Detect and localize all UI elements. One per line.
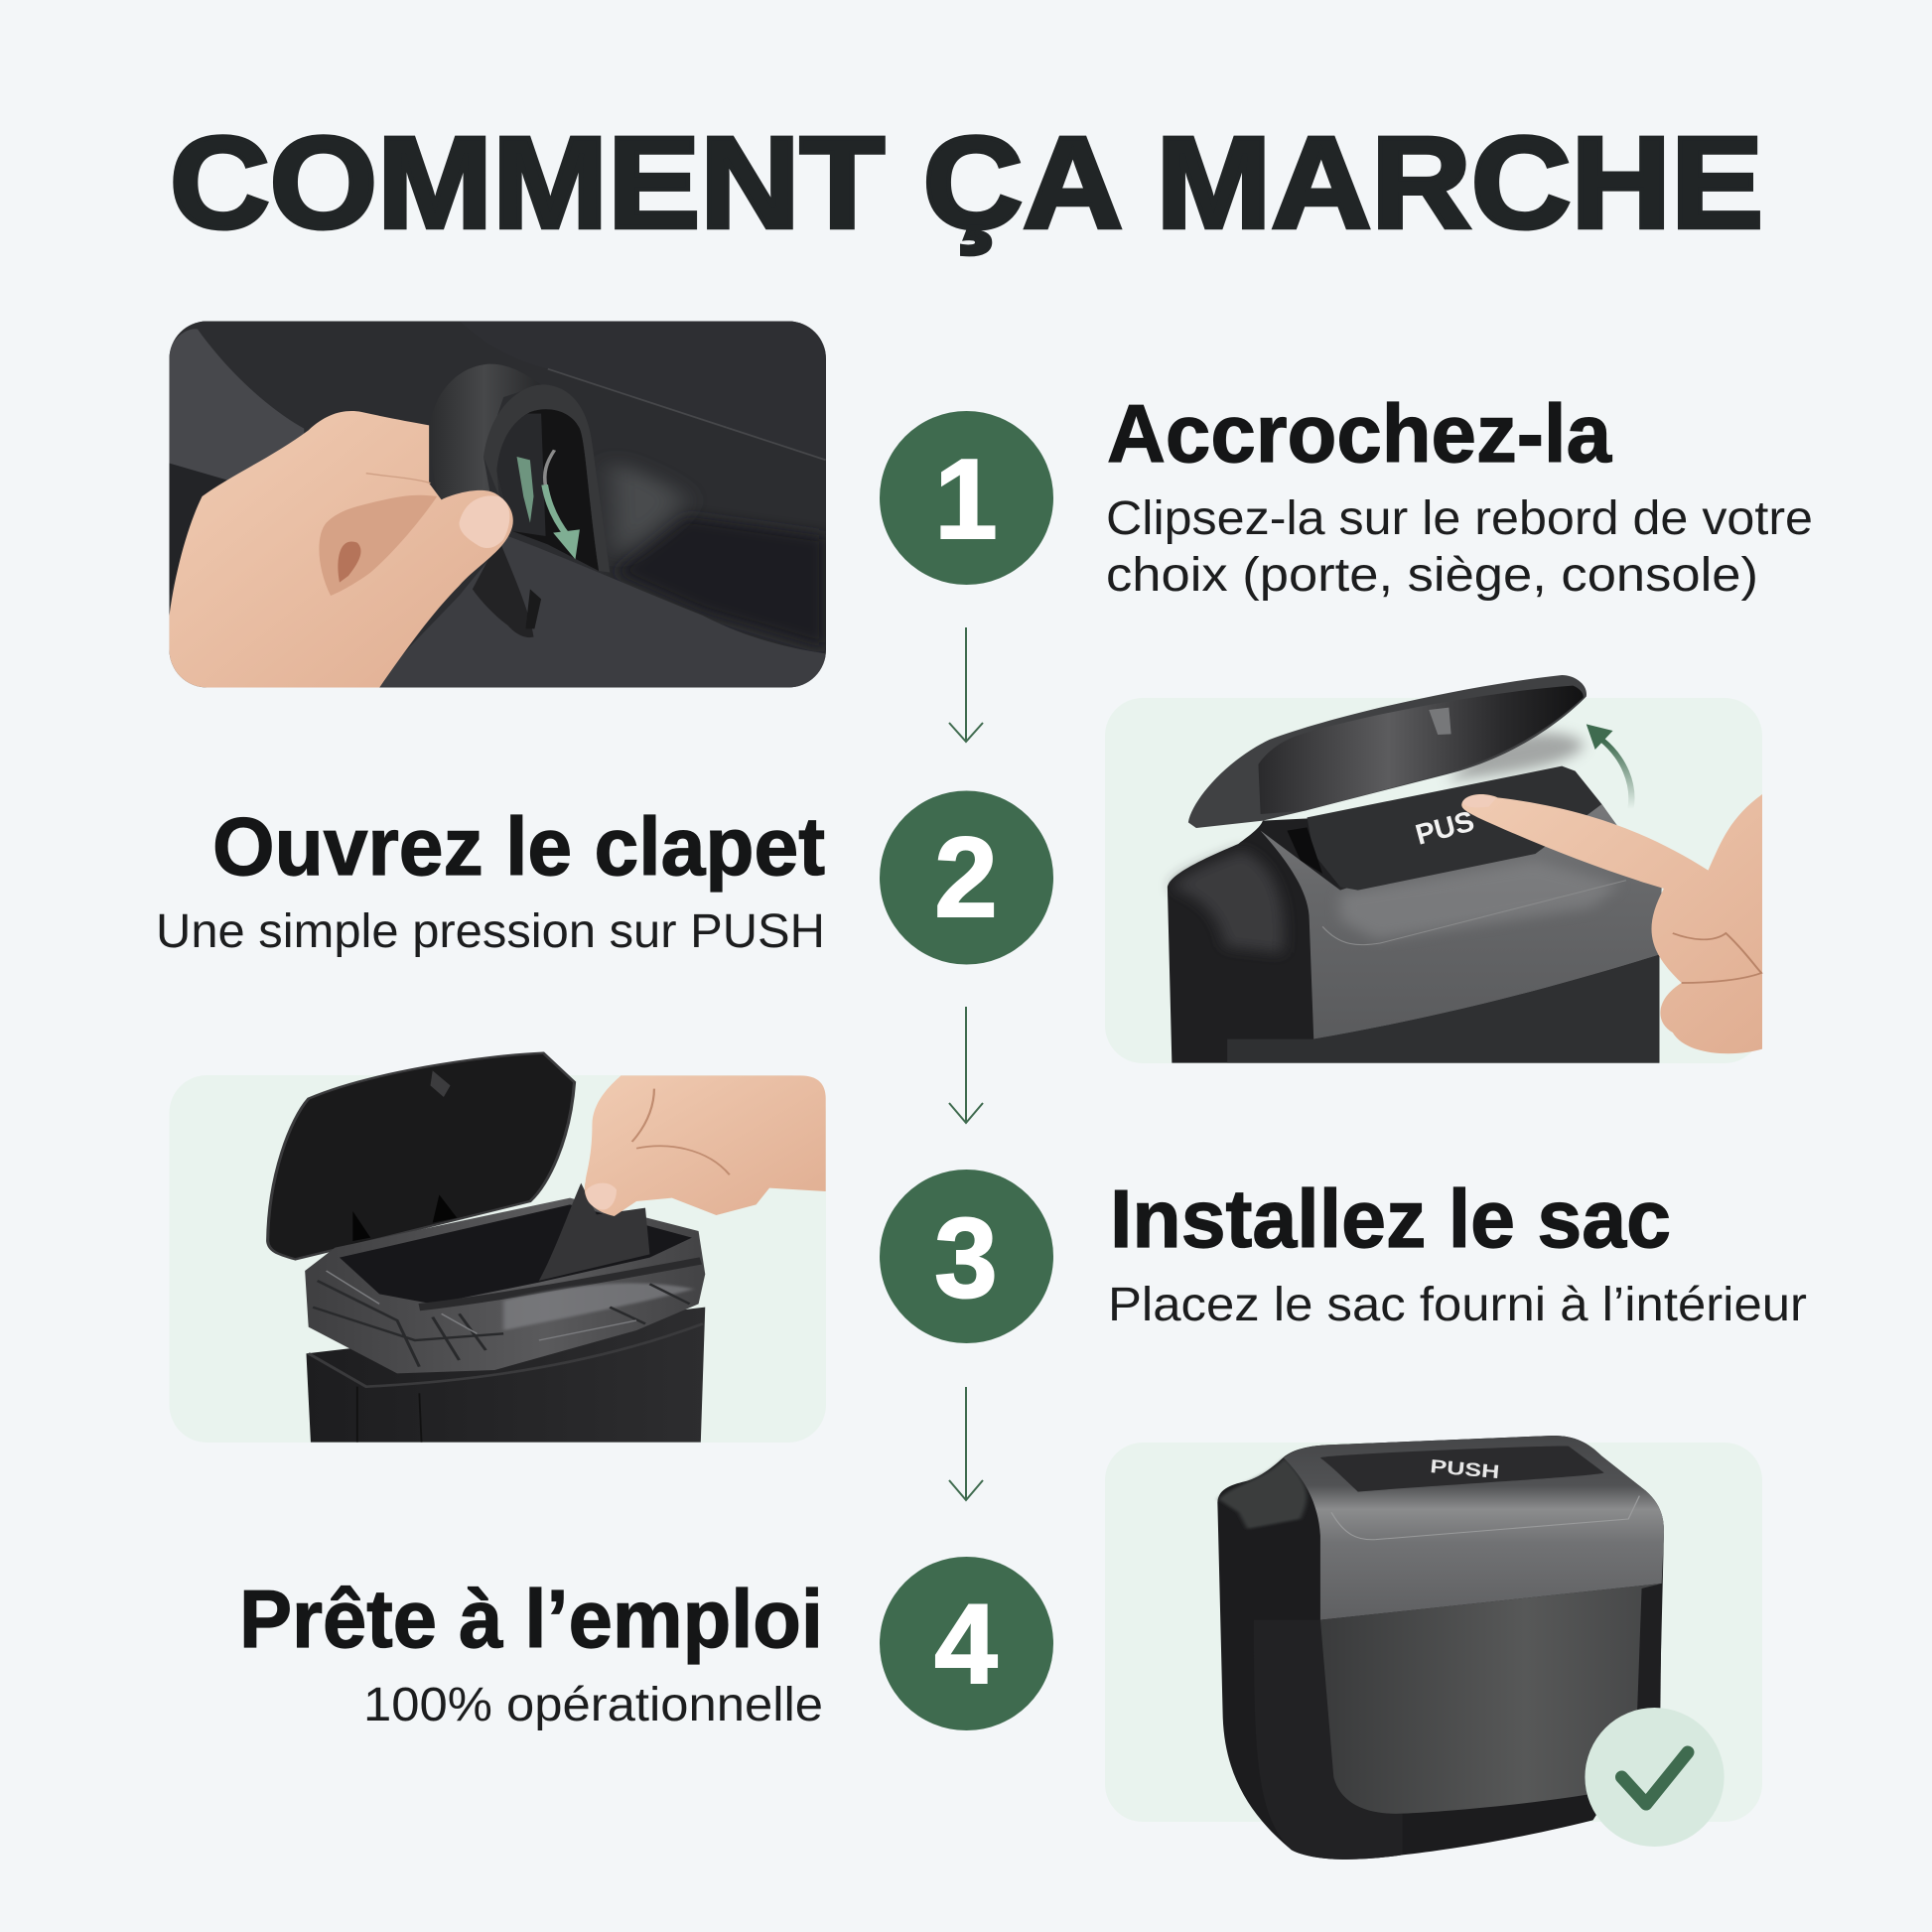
step 1 number badge: 1 [934,437,998,563]
step 3 heading: Installez le sac [1110,1173,1671,1265]
title: COMMENT ÇA MARCHE [170,109,1763,255]
step 4 description: 100% opérationnelle [363,1679,823,1731]
step 1 description: Clipsez-la sur le rebord de votre [1106,492,1813,545]
step 3 description: Placez le sac fourni à l’intérieur [1108,1279,1807,1331]
hand pressing [1461,794,1762,1053]
step 1 heading: Accrochez-la [1107,387,1612,480]
step 1 description: choix (porte, siège, console) [1106,549,1758,602]
step 2 heading: Ouvrez le clapet [212,800,825,893]
arrow: step 1 to 2 [949,627,983,742]
step 1 description [1106,492,1813,602]
panel: step 3 photo, installing the bag [169,1053,826,1443]
step 2 description: Une simple pression sur PUSH [156,905,825,958]
icon: black clip [428,364,610,637]
push button flap [1308,766,1601,891]
step 3 number badge [880,1170,1053,1343]
open lid [268,1053,575,1259]
hand holding the clip [170,411,513,688]
step 2 number badge: 2 [934,815,998,941]
hand pulling the bag [585,1075,826,1216]
check badge circle [1585,1708,1725,1847]
panel: step 2 photo, pressing PUSH [1105,675,1762,1063]
panel: step 1 photo, clip on the car door [169,321,826,688]
icon: green curved arrow [1587,724,1631,809]
step 4 number badge [880,1557,1053,1730]
step 3 number badge: 3 [934,1195,998,1321]
panel: step 4 photo, closed bin ready to use [1105,1436,1762,1860]
step 2 number badge [880,790,1053,965]
arrow: step 3 to 4 [949,1387,983,1500]
PUSH label on the lid: PUSH [1430,1456,1500,1483]
arrow: step 2 to 3 [949,1007,983,1123]
icon: check mark [1622,1752,1688,1804]
bin body [1168,804,1662,1063]
step 4 heading: Prête à l’emploi [239,1573,823,1665]
bin base [306,1308,705,1443]
closed bin [1217,1436,1664,1860]
PUS label on the flap: PUS [1413,805,1477,852]
step 4 number badge: 4 [934,1582,998,1708]
trash bag [305,1183,705,1373]
lid [1188,675,1587,828]
step 1 number badge [880,411,1053,585]
